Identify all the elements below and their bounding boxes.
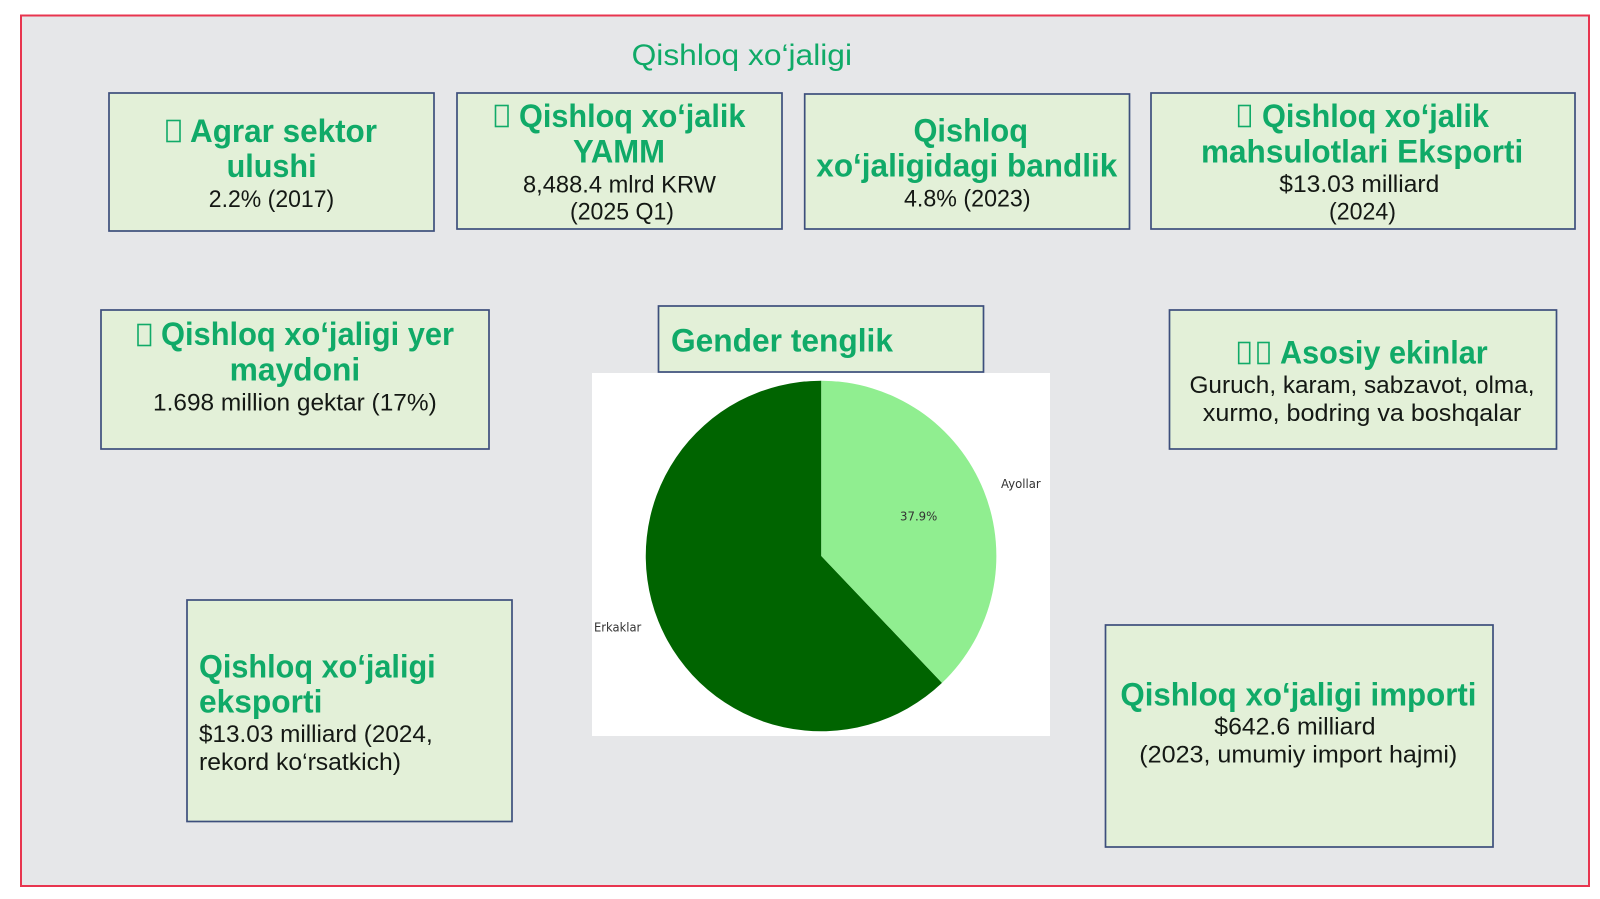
panel: Qishloq xo'jaligi eksporti: [187, 600, 512, 822]
value: (2023, umumiy import hajmi): [1139, 742, 1457, 768]
icon: missing glyph box: [1258, 342, 1269, 364]
chart: gender pie: [592, 373, 1050, 736]
value: [1190, 372, 1534, 427]
heading: Qishloq xo‘jalik: [519, 98, 746, 134]
pie slice: Erkaklar: [646, 381, 942, 731]
value: 8,488.4 mlrd KRW: [523, 171, 717, 198]
value: (2025 Q1): [570, 198, 674, 226]
heading: Qishloq xo‘jaligi: [199, 648, 436, 684]
icon: missing glyph box: [1239, 342, 1250, 364]
icon: missing glyph box: [167, 120, 180, 142]
label: Ayollar: Ayollar: [1001, 477, 1041, 491]
value: [523, 171, 717, 226]
heading: xo‘jaligidagi bandlik: [816, 148, 1117, 184]
panel: Qishloq xo'jaligidagi bandlik: [805, 94, 1130, 229]
icon: missing glyph box: [496, 106, 508, 126]
value: [199, 721, 433, 776]
panel: Qishloq xo'jaligi yer maydoni: [101, 310, 489, 449]
heading: ulushi: [227, 148, 317, 184]
icon: missing glyph box: [138, 324, 150, 346]
panel: Qishloq xo'jalik mahsulotlari Eksporti: [1151, 93, 1575, 229]
label: 37.9%: 37.9%: [900, 510, 937, 524]
pie slice: Ayollar: [821, 381, 996, 683]
value: $13.03 milliard (2024,: [199, 721, 433, 748]
heading: YAMM: [573, 134, 665, 170]
heading: [199, 648, 436, 720]
panel: Qishloq xo'jalik YAMM: [457, 93, 782, 229]
heading: Asosiy ekinlar: [1280, 334, 1488, 370]
value: [1139, 714, 1457, 768]
heading: [1201, 98, 1523, 170]
heading: [519, 98, 746, 170]
heading: Agrar sektor: [190, 113, 377, 149]
heading: mahsulotlari Eksporti: [1201, 134, 1523, 170]
heading: eksporti: [199, 684, 322, 720]
heading: Qishloq xo‘jaligi yer: [161, 316, 454, 352]
heading: maydoni: [230, 352, 360, 388]
value: 4.8% (2023): [904, 186, 1031, 213]
heading: Qishloq xo‘jalik: [1262, 98, 1489, 134]
heading: Qishloq xo‘jaligi importi: [1120, 676, 1476, 712]
heading: Gender tenglik: [671, 322, 893, 358]
value: rekord ko‘rsatkich): [199, 749, 401, 776]
panel: Asosiy ekinlar: [1170, 310, 1556, 449]
panel: Agrar sektor ulushi: [109, 93, 434, 231]
heading: Qishloq: [914, 112, 1028, 148]
panel: Qishloq xo'jaligi importi: [1106, 625, 1493, 847]
heading: [190, 113, 377, 184]
value: Guruch, karam, sabzavot, olma,: [1190, 372, 1534, 399]
value: [1279, 171, 1439, 226]
value: $13.03 milliard: [1279, 171, 1439, 198]
title: Qishloq xo‘jaligi: [632, 39, 852, 72]
value: xurmo, bodring va boshqalar: [1203, 400, 1521, 427]
value: $642.6 milliard: [1214, 714, 1376, 741]
value: (2024): [1329, 198, 1396, 226]
heading: [161, 316, 454, 388]
value: 2.2% (2017): [209, 186, 334, 213]
icon: missing glyph box: [1239, 106, 1250, 126]
value: 1.698 million gektar (17%): [153, 390, 437, 416]
panel: Gender tenglik: [658, 306, 984, 372]
heading: [816, 112, 1117, 184]
label: Erkaklar: Erkaklar: [594, 620, 641, 634]
